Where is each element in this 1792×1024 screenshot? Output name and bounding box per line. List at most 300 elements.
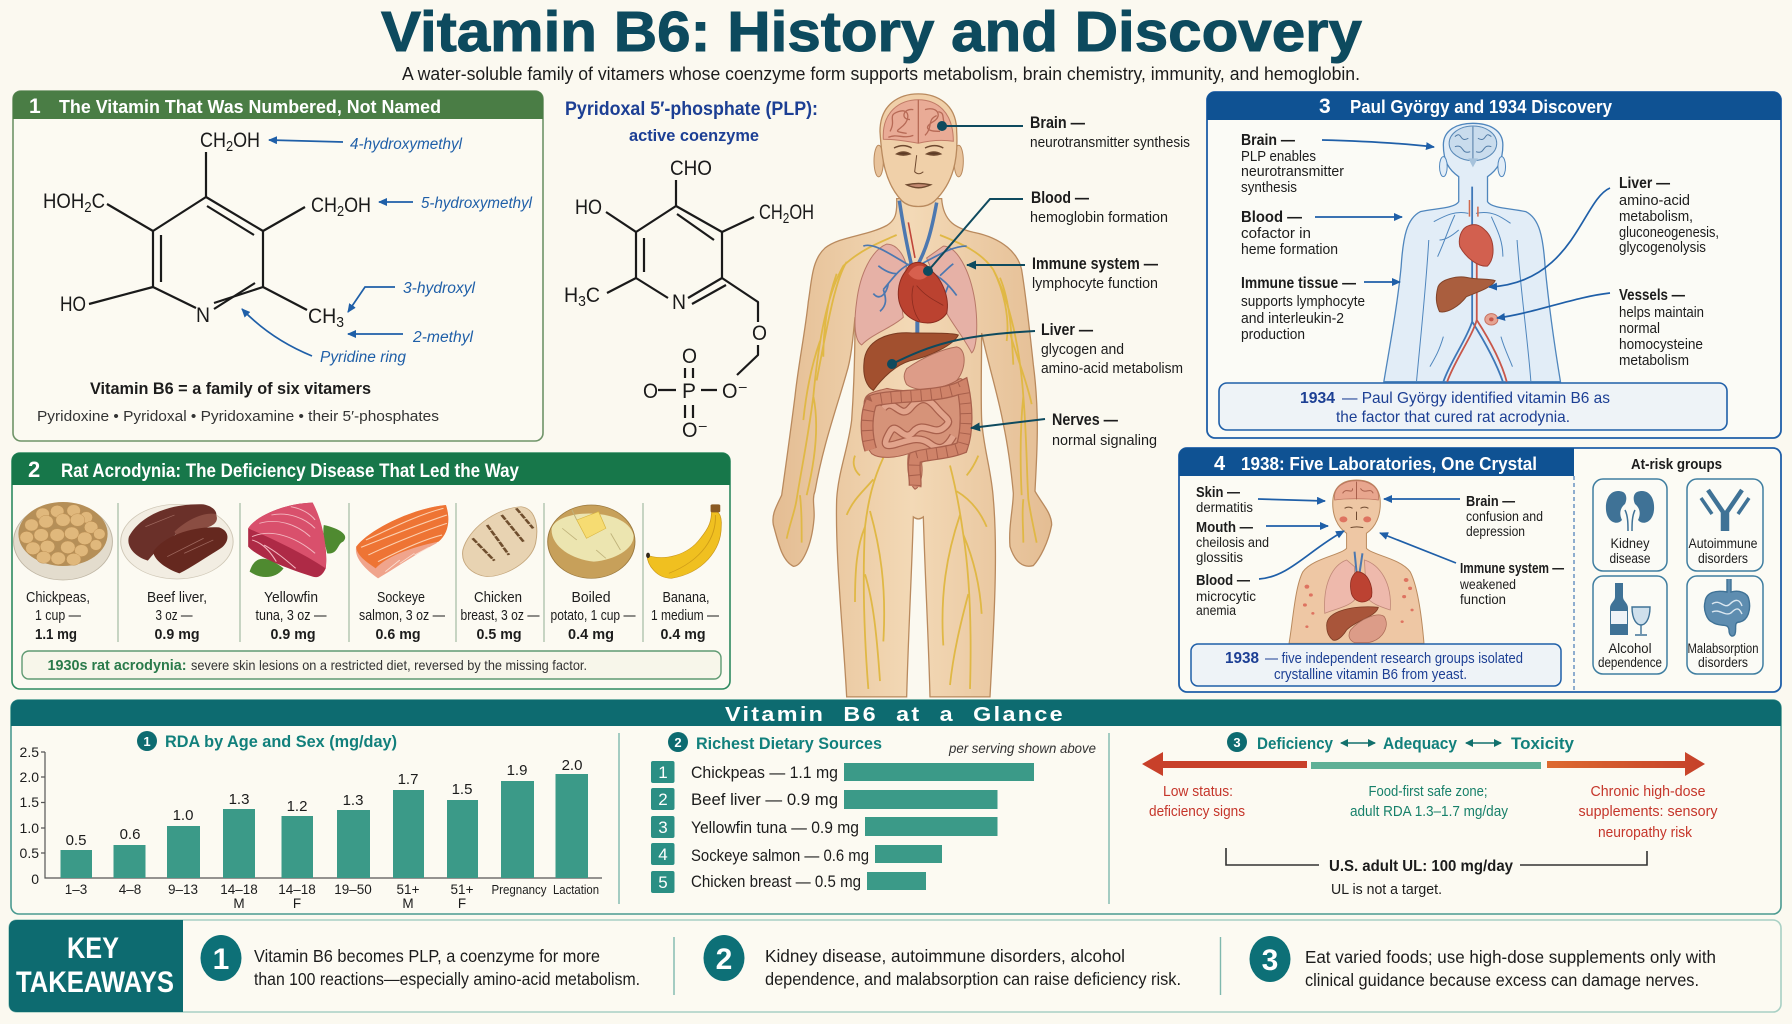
food: chicken breast	[463, 507, 537, 577]
x axis labels: 9–13	[168, 882, 198, 897]
callout: immune system: lymphocyte function	[1032, 275, 1158, 292]
figure brain	[1449, 126, 1497, 167]
intestines	[863, 379, 971, 489]
bar values: 1.5	[452, 781, 472, 798]
food-first text	[1350, 783, 1508, 820]
1934 note: — Paul György identified vitamin B6 as	[1342, 390, 1610, 407]
x axis labels: 51+	[451, 882, 474, 897]
figure vessels	[1430, 187, 1512, 382]
y axis labels: 0	[31, 871, 39, 887]
panel: key takeaways	[9, 920, 1781, 1012]
low status text	[1149, 783, 1245, 820]
food-first text: adult RDA 1.3–1.7 mg/day	[1350, 803, 1508, 820]
pyridoxine structure: 2	[337, 203, 344, 220]
lungs	[855, 244, 977, 353]
panel 1 header: 1	[29, 95, 41, 118]
face	[894, 146, 943, 188]
label: yellowfin tuna	[256, 590, 327, 643]
sources title: Richest Dietary Sources	[696, 734, 882, 753]
chronic high-dose text: supplements: sensory	[1578, 803, 1718, 820]
label: vessels: normal	[1619, 321, 1660, 337]
panel 4 right labels	[1459, 493, 1564, 607]
head	[880, 94, 957, 207]
callout: liver	[1041, 321, 1183, 377]
blue annotations: Pyridine ring	[320, 349, 406, 366]
label: immune tissue	[1241, 275, 1365, 343]
airway branches	[863, 245, 967, 337]
callout: brain	[1030, 114, 1190, 151]
source rows text: Beef liver — 0.9 mg	[691, 791, 838, 809]
label: brain: depression	[1466, 524, 1525, 539]
spectrum title: Adequacy	[1383, 734, 1457, 753]
PLP heading	[565, 99, 818, 145]
label: chickpeas	[26, 590, 90, 643]
food: sockeye salmon	[356, 505, 448, 578]
rank numbers: 3	[658, 818, 668, 837]
deficiency brain	[1334, 481, 1379, 500]
pale blue body figure	[1384, 123, 1560, 382]
y axis labels: 2.5	[20, 744, 39, 760]
central human anatomy figure	[773, 94, 1052, 697]
panel 4 header	[1179, 448, 1574, 476]
nerves	[787, 235, 1037, 689]
x axis labels: F	[293, 896, 301, 911]
blue annotations	[242, 136, 533, 366]
upper limit note: UL is not a target.	[1331, 882, 1442, 898]
label: skin	[1196, 484, 1253, 515]
x axis labels: F	[458, 896, 466, 911]
takeaway 1: 1	[213, 943, 229, 976]
panel 3 header: Paul György and 1934 Discovery	[1350, 97, 1612, 117]
pyridoxine structure: OH	[344, 194, 371, 217]
heart	[898, 262, 947, 323]
PLP molecule: O	[682, 345, 697, 368]
panel: vitamin B6 at a glance	[11, 700, 1781, 914]
sources title: 2	[674, 735, 682, 750]
label: boiled potato: Boiled	[572, 590, 610, 606]
PLP molecule: N	[672, 291, 686, 314]
panel 1 header: The Vitamin That Was Numbered, Not Named	[59, 97, 441, 117]
label: yellowfin tuna: Yellowfin	[264, 590, 318, 606]
rank numbers: 1	[658, 763, 668, 782]
y axis labels	[20, 744, 39, 887]
pyridoxine structure: CH	[308, 305, 338, 328]
callout: brain: Brain —	[1030, 114, 1085, 132]
food labels	[26, 503, 719, 643]
label: yellowfin tuna: 0.9 mg	[270, 627, 316, 643]
food: boiled potato	[548, 505, 635, 578]
blue annotations: 5-hydroxymethyl	[421, 195, 533, 212]
y axis labels: 2.0	[20, 769, 39, 785]
skin lesions	[1303, 516, 1414, 628]
key takeaways label: TAKEAWAYS	[16, 966, 174, 999]
callout leader lines	[892, 126, 1045, 428]
label: sockeye salmon: Sockeye	[377, 590, 425, 606]
rank numbers: 2	[658, 790, 668, 809]
low status text: deficiency signs	[1149, 803, 1245, 820]
PLP molecule: CH	[759, 201, 789, 224]
chart: RDA by age and sex	[20, 731, 602, 911]
pyridoxine structure	[43, 129, 371, 331]
label: blood	[1241, 209, 1338, 258]
callout: nerves	[1052, 411, 1157, 449]
PLP molecule: 3	[578, 293, 586, 310]
label: chicken breast: breast, 3 oz —	[460, 608, 540, 624]
at-risk groups heading: At-risk groups	[1631, 456, 1722, 473]
callout: liver: amino-acid metabolism	[1041, 360, 1183, 377]
label: blood	[1196, 572, 1256, 618]
tile: kidney disease: Kidney	[1610, 536, 1650, 551]
tile: kidney disease	[1593, 479, 1667, 571]
label: liver	[1619, 175, 1719, 256]
takeaway 2	[704, 935, 1181, 989]
label: immune tissue: supports lymphocyte	[1241, 294, 1365, 310]
deficiency heart	[1350, 572, 1372, 602]
takeaway 2: dependence, and malabsorption can raise deficiency risk.	[765, 969, 1181, 989]
RDA chart title: RDA by Age and Sex (mg/day)	[165, 732, 397, 751]
label: immune tissue: production	[1241, 327, 1305, 343]
label: brain: Brain —	[1466, 493, 1515, 510]
callout: immune system	[1032, 255, 1158, 292]
bar values: 0.5	[66, 832, 86, 849]
pyridoxine structure: 3	[336, 314, 344, 331]
label: immune system: Immune system —	[1460, 560, 1564, 577]
label: beef liver: 3 oz —	[156, 608, 193, 624]
1934 note: 1934	[1300, 390, 1335, 407]
label: mouth: glossitis	[1196, 550, 1243, 565]
acrodynia note	[22, 651, 721, 679]
family caption: Vitamin B6 = a family of six vitamers	[90, 379, 371, 398]
chronic high-dose text: Chronic high-dose	[1590, 783, 1706, 800]
tile: malabsorption disorders: disorders	[1698, 655, 1748, 670]
1938 note: — five independent research groups isolated	[1265, 651, 1523, 667]
1934 note: the factor that cured rat acrodynia.	[1336, 409, 1570, 426]
label: vessels: homocysteine	[1619, 337, 1703, 353]
spectrum arrow	[1142, 752, 1705, 776]
axes	[41, 752, 602, 878]
food-first text: Food-first safe zone;	[1368, 783, 1488, 800]
panel 4 header: 1938: Five Laboratories, One Crystal	[1241, 454, 1537, 474]
rank squares	[651, 761, 674, 893]
label: yellowfin tuna: tuna, 3 oz —	[256, 608, 327, 624]
deficiency face	[1345, 507, 1368, 528]
bar values: 2.0	[562, 757, 582, 774]
pyridoxine structure: HOH	[43, 190, 90, 213]
bar values: 1.0	[173, 807, 193, 824]
label: banana: 1 medium —	[651, 608, 719, 624]
label: sockeye salmon: salmon, 3 oz —	[359, 608, 445, 624]
PLP molecule: O⁻	[682, 419, 708, 442]
label: sockeye salmon	[359, 590, 445, 643]
pyridoxine structure: N	[196, 304, 210, 327]
food: banana	[646, 504, 721, 578]
tile: autoimmune disorders: disorders	[1698, 551, 1748, 566]
tile: kidney disease: disease	[1610, 551, 1650, 566]
spectrum title: Deficiency	[1257, 734, 1333, 753]
deficiency figure	[1289, 480, 1424, 643]
x axis labels: M	[233, 896, 245, 911]
label: beef liver: Beef liver,	[147, 590, 207, 606]
upper limit bracket	[1226, 848, 1647, 865]
x axis labels: 1–3	[65, 882, 87, 897]
callout: brain: neurotransmitter synthesis	[1030, 134, 1190, 151]
source rows text: Chicken breast — 0.5 mg	[691, 873, 861, 891]
stomach	[904, 347, 964, 390]
label: mouth: Mouth —	[1196, 519, 1253, 536]
human figure callouts	[887, 114, 1190, 449]
pyridoxine structure: C	[92, 190, 105, 213]
bar values: 1.2	[287, 798, 307, 815]
source rows text: Yellowfin tuna — 0.9 mg	[691, 819, 859, 837]
body silhouette	[1384, 123, 1560, 382]
1938 note: 1938	[1225, 650, 1259, 667]
callout: blood: Blood —	[1031, 189, 1089, 207]
food: beef liver	[121, 504, 233, 579]
blue annotations: 3-hydroxyl	[403, 280, 476, 297]
label: blood: microcytic	[1196, 589, 1256, 604]
callout: immune system: Immune system —	[1032, 255, 1158, 273]
bar values: 1.9	[507, 762, 527, 779]
neck vessels	[899, 201, 937, 270]
label: brain: Brain —	[1241, 132, 1295, 149]
label: banana: 0.4 mg	[660, 627, 706, 643]
acrodynia note: severe skin lesions on a restricted diet, reversed by the missing factor.	[191, 657, 587, 673]
1938 note	[1191, 644, 1561, 686]
pyridoxine structure: 2	[84, 199, 92, 216]
label: chicken breast	[460, 590, 540, 643]
label: chicken breast: 0.5 mg	[476, 627, 522, 643]
pyridoxine structure: OH	[233, 129, 260, 152]
takeaway 1: Vitamin B6 becomes PLP, a coenzyme for more	[254, 946, 600, 966]
brain	[883, 100, 953, 143]
callout: nerves: normal signaling	[1052, 432, 1157, 449]
label: immune system: weakened	[1459, 577, 1516, 592]
panel 4: 1938 five laboratories	[1179, 448, 1781, 692]
label: boiled potato: potato, 1 cup —	[550, 608, 636, 624]
callout: blood	[1030, 189, 1168, 226]
chart: deficiency adequacy toxicity spectrum	[1142, 732, 1718, 898]
rank numbers	[658, 763, 668, 892]
key takeaways label: KEY	[67, 932, 119, 965]
label: immune system: function	[1460, 592, 1506, 607]
panel 2 header: Rat Acrodynia: The Deficiency Disease That Led the Way	[61, 461, 519, 482]
takeaway 2: 2	[716, 943, 732, 976]
takeaway 3: clinical guidance because excess can damage nerves.	[1305, 970, 1699, 990]
label: skin: Skin —	[1196, 484, 1240, 501]
label: vessels: helps maintain	[1619, 305, 1704, 321]
label: chicken breast: Chicken	[474, 590, 522, 606]
liver	[864, 333, 958, 390]
label: boiled potato	[550, 590, 636, 643]
callout: blood: hemoglobin formation	[1030, 209, 1168, 226]
source rows text: Sockeye salmon — 0.6 mg	[691, 847, 869, 865]
pyridoxine structure: CH	[200, 129, 230, 152]
x axis labels: 4–8	[119, 882, 141, 897]
deficiency liver	[1327, 607, 1378, 640]
x axis labels: Pregnancy	[492, 883, 547, 897]
label: beef liver	[147, 590, 207, 643]
source rows text: Chickpeas — 1.1 mg	[691, 764, 838, 782]
sources note: per serving shown above	[948, 741, 1096, 756]
bars	[60, 774, 588, 878]
PLP molecule	[564, 157, 814, 442]
food: yellowfin tuna	[248, 503, 345, 577]
PLP molecule: O⁻	[722, 380, 748, 403]
tile: autoimmune disorders: Autoimmune	[1688, 536, 1758, 551]
deficiency vessels	[1355, 552, 1362, 580]
callout: liver: glycogen and	[1041, 341, 1124, 358]
ears	[874, 145, 963, 177]
deficiency body	[1289, 480, 1424, 643]
panel 2 header: 2	[28, 457, 40, 482]
bar values	[66, 757, 582, 849]
PLP structure block	[564, 99, 818, 442]
title: Vitamin B6: History and Discovery	[381, 0, 1362, 64]
label: blood: cofactor in	[1241, 226, 1311, 242]
callout: nerves: Nerves —	[1052, 411, 1118, 429]
label: brain: PLP enables	[1241, 149, 1316, 165]
source bars	[844, 763, 1034, 890]
x axis labels	[65, 882, 599, 911]
rank numbers: 4	[658, 845, 668, 864]
panel 4 arrows	[1258, 499, 1460, 579]
PLP molecule: HO	[575, 196, 602, 219]
upper limit text: U.S. adult UL: 100 mg/day	[1329, 858, 1513, 875]
1938 note: crystalline vitamin B6 from yeast.	[1274, 667, 1467, 683]
takeaway 1: than 100 reactions—especially amino-acid metabolism.	[254, 969, 640, 989]
label: chickpeas: 1 cup —	[35, 608, 81, 624]
label: vessels: Vessels —	[1619, 287, 1685, 304]
label: brain: confusion and	[1466, 509, 1543, 524]
label: liver: glycogenolysis	[1619, 240, 1706, 256]
y axis labels: 1.5	[20, 794, 39, 810]
label: liver: metabolism,	[1619, 209, 1693, 225]
label: vessels	[1619, 287, 1704, 369]
label: blood: anemia	[1196, 603, 1236, 618]
panel 4 left labels	[1196, 484, 1269, 618]
panel 3 header	[1207, 92, 1781, 120]
label: banana	[651, 590, 719, 643]
label: mouth: cheilosis and	[1196, 535, 1269, 550]
panel 3 left labels	[1241, 132, 1365, 343]
subtitle: A water-soluble family of vitamers whose coenzyme form supports metabolism, brain chemistry, immunity, and hemoglobin.	[402, 64, 1360, 84]
blue annotations: 2-methyl	[412, 329, 474, 346]
label: mouth	[1196, 519, 1269, 565]
low status text: Low status:	[1163, 783, 1233, 800]
tile: alcohol dependence	[1593, 576, 1667, 674]
PLP molecule: CHO	[670, 157, 712, 180]
x axis labels: M	[402, 896, 414, 911]
takeaway 3	[1250, 936, 1716, 990]
pyridoxine structure: CH	[311, 194, 341, 217]
figure ears	[1440, 157, 1506, 177]
label: brain	[1466, 493, 1543, 539]
tile: alcohol dependence: Alcohol	[1608, 641, 1652, 656]
callout: liver: Liver —	[1041, 321, 1093, 339]
glance header	[11, 700, 1781, 726]
spectrum title	[1227, 732, 1575, 753]
PLP molecule: O	[752, 322, 767, 345]
label: skin: dermatitis	[1196, 500, 1253, 515]
deficiency stomach	[1349, 615, 1386, 643]
pyridoxine structure: HO	[60, 293, 86, 316]
panel 3: Paul György and 1934 discovery	[1207, 92, 1781, 438]
label: immune tissue: Immune tissue —	[1241, 275, 1356, 292]
label: chickpeas: 1.1 mg	[35, 627, 77, 643]
label: brain: synthesis	[1241, 180, 1297, 196]
x axis labels: 51+	[397, 882, 420, 897]
panel 3 arrows	[1315, 140, 1610, 318]
label: sockeye salmon: 0.6 mg	[376, 627, 420, 643]
panel 1: the vitamin that was numbered	[13, 91, 543, 441]
label: banana: Banana,	[662, 590, 710, 606]
takeaway 3: 3	[1262, 944, 1278, 977]
y axis labels: 0.5	[20, 845, 39, 861]
label: immune system	[1459, 560, 1564, 607]
figure vessel detail	[1485, 314, 1498, 325]
panel 4 header: 4	[1214, 453, 1226, 475]
PLP molecule: H	[564, 284, 579, 307]
bar values: 1.7	[398, 771, 418, 788]
key takeaways label	[9, 920, 183, 1012]
label: liver: Liver —	[1619, 175, 1670, 192]
label: brain	[1241, 132, 1344, 196]
figure heart	[1459, 225, 1493, 266]
PLP molecule: P	[682, 380, 696, 403]
label: blood: heme formation	[1241, 242, 1338, 258]
takeaway 1	[200, 935, 640, 989]
PLP molecule: C	[586, 284, 600, 307]
x axis labels: Lactation	[553, 883, 599, 897]
panel 3 header: 3	[1319, 95, 1331, 118]
x axis labels: 14–18	[278, 882, 316, 897]
chronic high-dose text	[1578, 783, 1718, 841]
blue annotations: 4-hydroxymethyl	[350, 136, 463, 153]
label: blood: Blood —	[1241, 209, 1302, 226]
panel 2: rat acrodynia	[12, 453, 730, 689]
PLP molecule: 2	[783, 210, 789, 227]
food: chickpeas	[14, 502, 112, 580]
label: liver: gluconeogenesis,	[1619, 225, 1719, 241]
label: boiled potato: 0.4 mg	[568, 627, 614, 643]
label: blood: Blood —	[1196, 572, 1250, 589]
food illustrations	[14, 502, 721, 580]
label: brain: neurotransmitter	[1241, 164, 1344, 180]
tile: malabsorption disorders: Malabsorption	[1688, 641, 1758, 656]
bar values: 1.3	[343, 792, 363, 809]
x axis labels: 14–18	[220, 882, 258, 897]
figure liver	[1436, 277, 1495, 312]
label: liver: amino-acid	[1619, 193, 1690, 209]
PLP heading: Pyridoxal 5′-phosphate (PLP):	[565, 99, 818, 120]
label: beef liver: 0.9 mg	[154, 627, 200, 643]
pyridoxine structure: 2	[226, 138, 233, 155]
y axis labels: 1.0	[20, 820, 39, 836]
tile: alcohol dependence: dependence	[1598, 655, 1662, 670]
panel 1 header	[13, 91, 543, 119]
PLP molecule: O	[643, 380, 658, 403]
rank numbers: 5	[658, 873, 668, 892]
takeaway 2: Kidney disease, autoimmune disorders, alcohol	[765, 946, 1125, 966]
label: immune tissue: and interleukin-2	[1241, 311, 1344, 327]
PLP molecule: OH	[789, 201, 814, 224]
label: vessels: metabolism	[1619, 353, 1689, 369]
vitamer list: Pyridoxine • Pyridoxal • Pyridoxamine • their 5′-phosphates	[37, 408, 439, 425]
spectrum title: 3	[1233, 735, 1241, 750]
label: chickpeas: Chickpeas,	[26, 590, 90, 606]
source rows text	[691, 764, 869, 891]
PLP heading: active coenzyme	[629, 127, 759, 145]
